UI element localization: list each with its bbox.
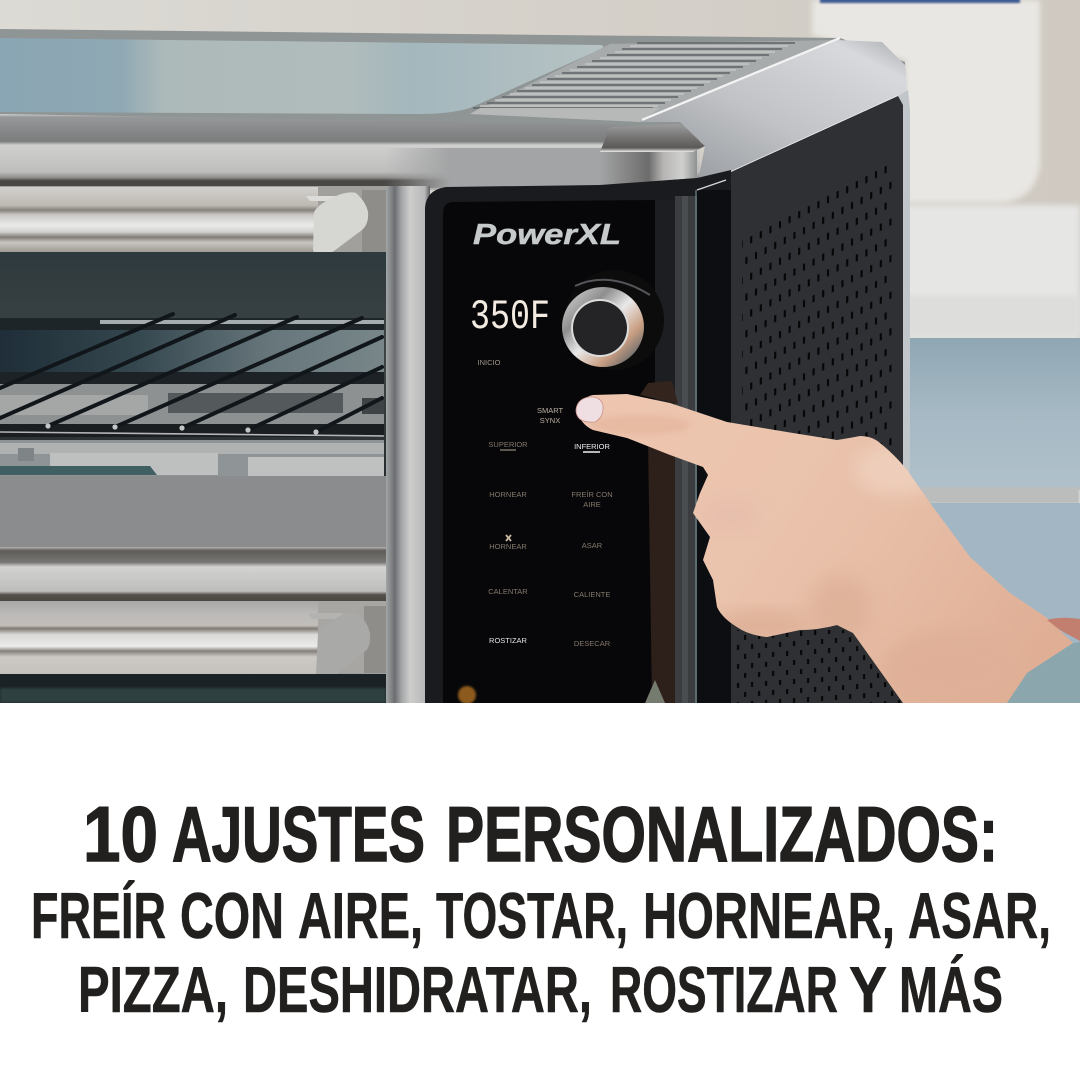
panel button labels: HORNEAR [489,542,527,551]
headline line 3 [78,953,1003,1026]
panel glass [443,200,655,703]
headline line 3: ROSTIZAR [610,953,838,1026]
black control panel [425,170,731,703]
headline caption [31,790,1051,1026]
lower door trim [0,547,400,605]
stainless front trim [0,114,700,188]
brand logo: PowerXL [473,219,621,251]
brushed steel above panel [385,148,610,190]
stainless top right edge [640,40,909,180]
headline line 2: CON [180,879,284,952]
icon: convection fan [506,535,511,541]
white caption area [0,703,1080,1080]
headline line 2: FREÍR [31,879,166,952]
lower oven window [0,674,386,703]
headline line 1: AJUSTES [172,790,425,878]
panel button labels: DESECAR [574,639,611,648]
panel button labels: INFERIOR [574,442,610,451]
sweater sleeve [1007,642,1080,703]
panel button labels: HORNEAR [489,490,527,499]
oven top vent [470,38,840,122]
dial knob [562,270,664,370]
panel button labels [478,358,613,648]
lower door handle [0,601,393,682]
other hand fingertip [1047,618,1080,641]
upper door handle [0,187,392,258]
hand pointing at panel [576,394,1073,710]
headline line 2: HORNEAR, [643,879,895,952]
active indicator lines [500,450,600,452]
left door frame [0,186,400,703]
middle door bar [0,476,392,551]
panel button labels: ASAR [582,541,603,550]
headline line 3: DESHIDRATAR, [243,953,592,1026]
panel button labels: FREÍR CON [571,490,613,499]
headline line 1: 10 [83,790,158,878]
panel button labels: CALENTAR [488,587,528,596]
panel button labels: SMART [537,406,563,415]
white edge above side panel [731,96,898,172]
fingernail [576,397,603,422]
oven top rim [0,29,905,130]
perforated side panel [731,96,903,703]
panel button labels: INICIO [478,358,501,367]
panel button labels: ROSTIZAR [489,636,528,645]
upper oven window with rack [0,252,386,477]
kitchen background [0,0,1080,703]
oven top glass [0,38,603,114]
headline line 2: AIRE, [298,879,423,952]
photo: oven control panel close-up [0,0,1080,710]
headline line 3: Y [849,953,887,1026]
headline line 1 [83,790,998,878]
hand shading [592,416,922,703]
panel button labels: SYNX [540,416,560,425]
headline line 3: PIZZA, [78,953,228,1026]
panel side reflections [458,180,731,704]
headline line 2: TOSTAR, [436,879,628,952]
stainless vertical post [386,186,430,703]
panel button labels: SUPERIOR [488,440,528,449]
headline line 2 [31,879,1051,952]
panel button labels: CALIENTE [574,590,610,599]
stainless right edge strip [898,90,910,703]
temperature display: 350F [470,293,550,341]
panel button labels: AIRE [583,500,601,509]
stainless corner below cap [600,150,697,186]
headline line 3: MÁS [899,953,1003,1026]
stainless corner cap [600,124,705,152]
